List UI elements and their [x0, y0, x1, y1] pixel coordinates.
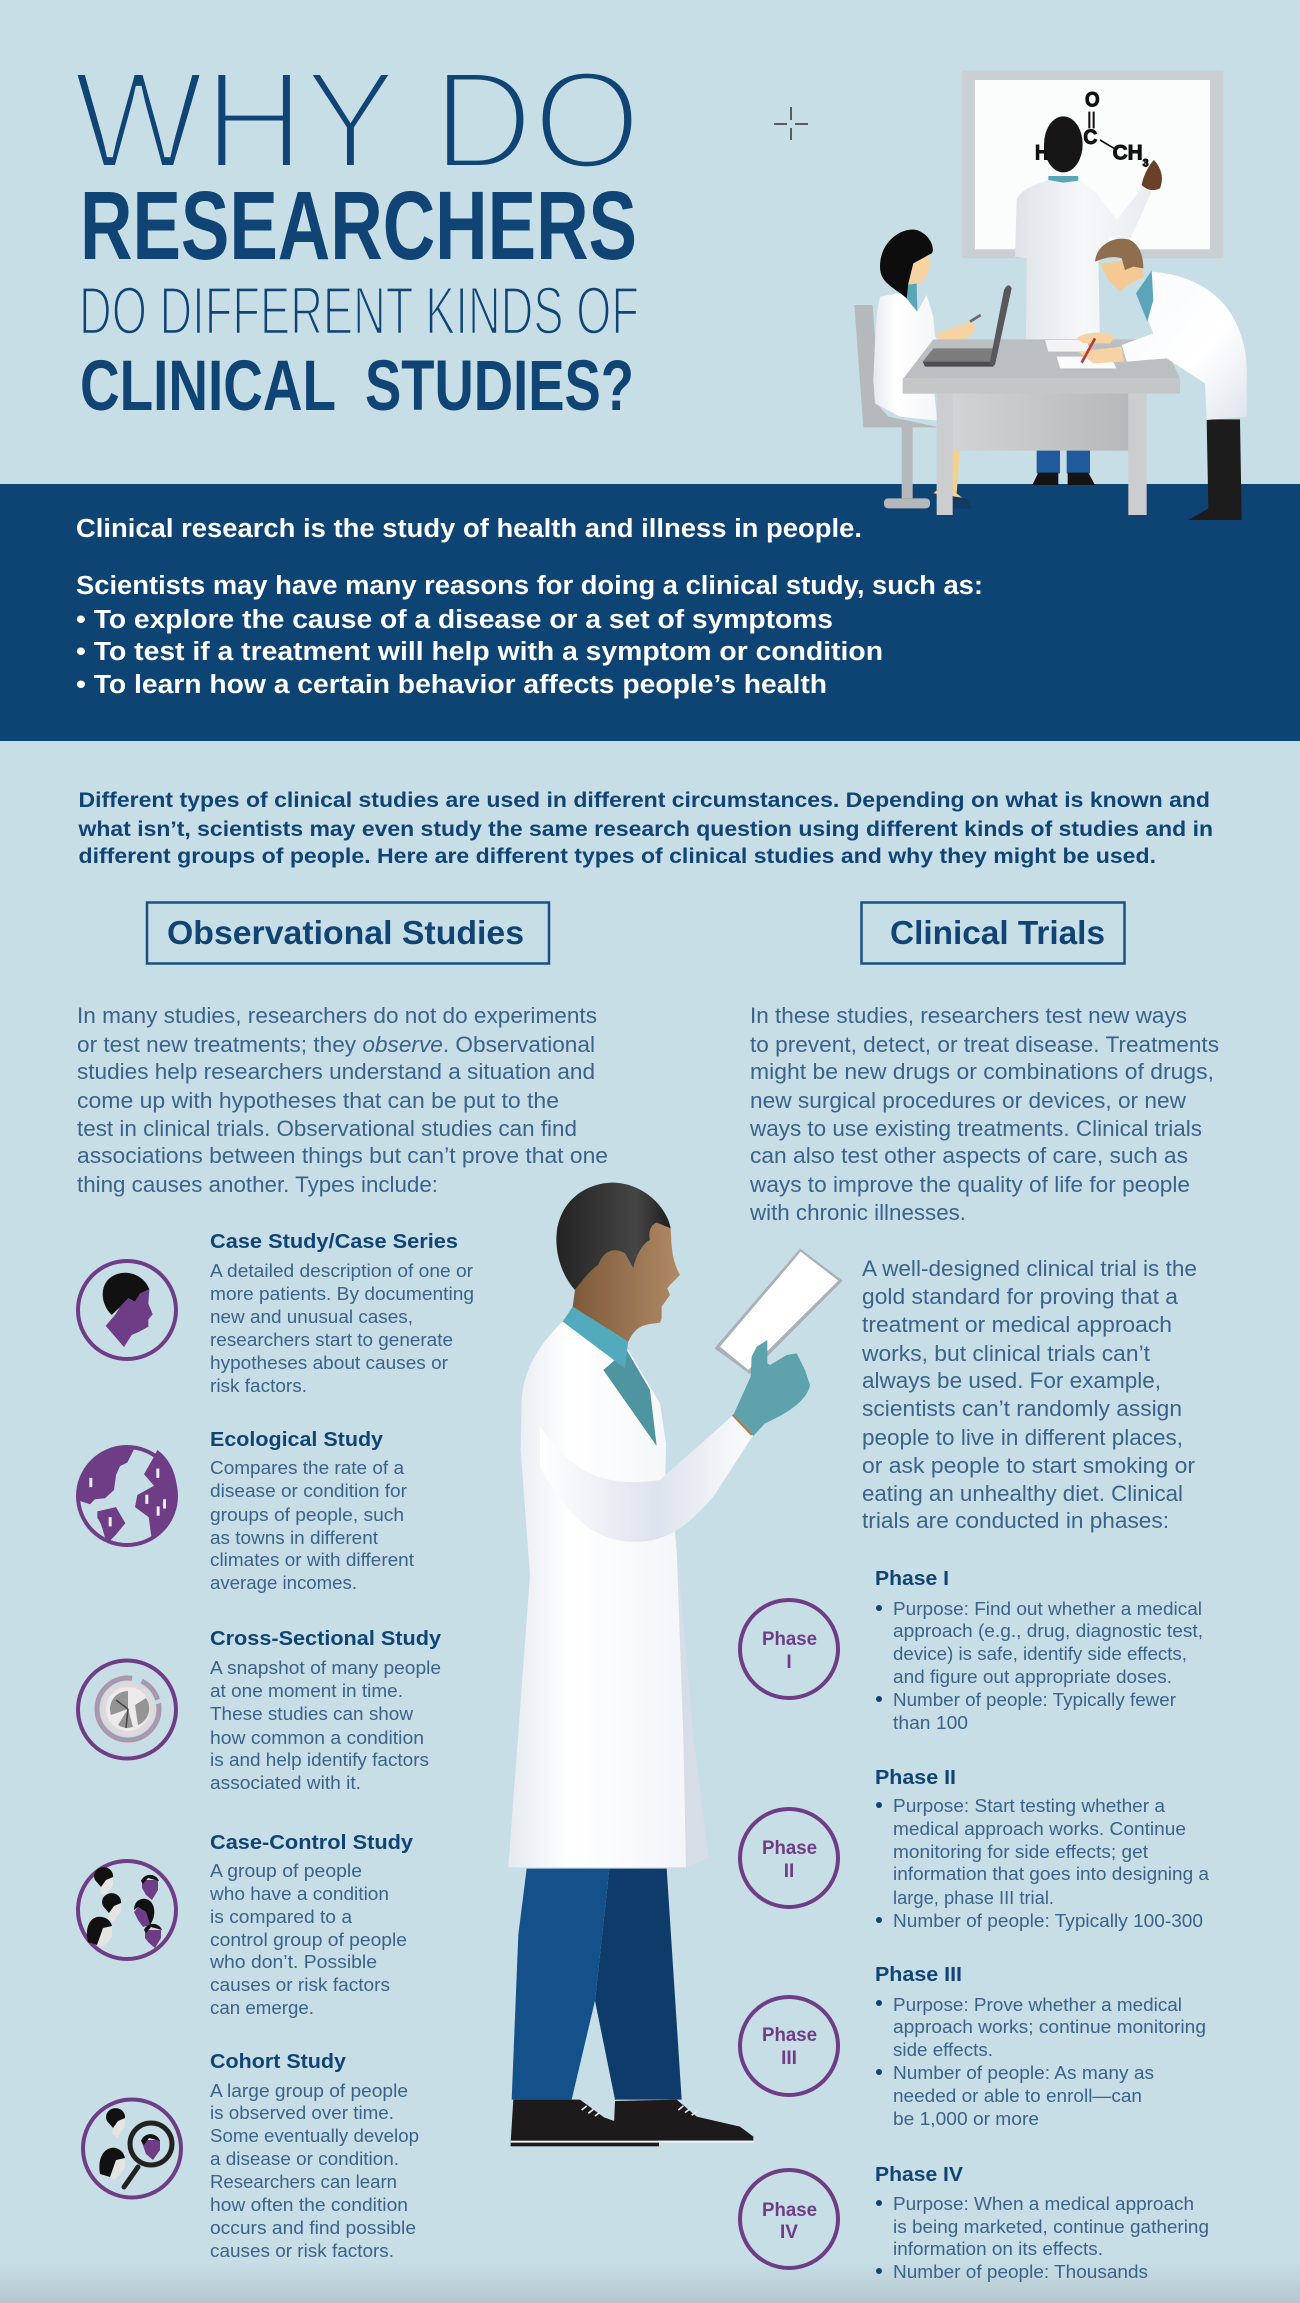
- text block: case study: new and unusual cases,: [210, 1306, 413, 1327]
- text block: cross-sectional study: is and help identify factors: [210, 1749, 429, 1770]
- text block: observational studies description: come up with hypotheses that can be put to the: [77, 1088, 559, 1113]
- panel: navy introduction band: • To explore the cause of a disease or a set of symptoms: [76, 606, 833, 634]
- phase IV badge: IV: [780, 2222, 798, 2243]
- text block: case study: [210, 1230, 474, 1396]
- chemical formula: CH: [1113, 140, 1143, 164]
- illustration: scientist with tablet: [508, 1183, 843, 2146]
- phase III text: side effects.: [893, 2039, 993, 2060]
- text block: cross-sectional study: [210, 1627, 442, 1793]
- phase I text: device) is safe, identify side effects,: [893, 1643, 1187, 1664]
- table: [903, 339, 1180, 515]
- text block: cohort study: A large group of people: [210, 2080, 408, 2101]
- title: RESEARCHERS: [80, 171, 637, 280]
- text block: ecological study: average incomes.: [210, 1572, 357, 1593]
- icon: globe: [77, 1447, 177, 1545]
- text block: case-control study: is compared to a: [210, 1906, 353, 1927]
- phase II text: Phase II: [875, 1766, 956, 1789]
- chemical formula: 3: [1143, 158, 1149, 170]
- text block: observational studies description: In many studies, researchers do not do experiments: [77, 1003, 597, 1028]
- text block: observational studies description: [77, 1003, 608, 1197]
- phase I badge: I: [786, 1652, 792, 1673]
- phase III text: Number of people: As many as: [893, 2062, 1154, 2083]
- text block: clinical trials description: to prevent, detect, or treat disease. Treatments: [750, 1032, 1219, 1057]
- text block: case-control study: can emerge.: [210, 1997, 314, 2018]
- text block: observational studies description: or test new treatments; they observe. Observational: [77, 1032, 595, 1057]
- phase I badge: [740, 1600, 838, 1698]
- gloved hand: [733, 1340, 810, 1436]
- text block: cross-sectional study: at one moment in time.: [210, 1680, 403, 1701]
- text block: clinical trials description: new surgical procedures or devices, or new: [750, 1088, 1186, 1113]
- text block: cohort study: Cohort Study: [210, 2050, 347, 2073]
- shirt and collar: [563, 1307, 657, 1446]
- shoes: [511, 2100, 754, 2146]
- text block: cohort study: is observed over time.: [210, 2102, 394, 2123]
- text block: ecological study: Ecological Study: [210, 1428, 384, 1451]
- icon: clock: [78, 1660, 176, 1758]
- text block: clinical trials description: with chronic illnesses.: [749, 1200, 966, 1225]
- text block: clinical trials description: might be new drugs or combinations of drugs,: [750, 1059, 1214, 1084]
- phase II text: Number of people: Typically 100-300: [893, 1910, 1203, 1931]
- phase IV text: information on its effects.: [893, 2238, 1103, 2259]
- text block: cohort study: Some eventually develop: [210, 2125, 419, 2146]
- seated researcher and chair: [854, 229, 981, 508]
- icon: case study head: [78, 1261, 176, 1359]
- phase III text: approach works; continue monitoring: [893, 2016, 1206, 2037]
- phase III text: Purpose: Prove whether a medical: [893, 1994, 1182, 2015]
- whiteboard: [962, 71, 1223, 258]
- phase I text: Purpose: Find out whether a medical: [893, 1598, 1202, 1619]
- text block: clinical trials description: ways to use existing treatments. Clinical trials: [749, 1116, 1202, 1141]
- text block: case study: Case Study/Case Series: [210, 1230, 458, 1253]
- chemical formula: H: [1035, 140, 1048, 164]
- phase I text: [875, 1567, 1203, 1733]
- phase III text: be 1,000 or more: [893, 2108, 1039, 2129]
- text block: case-control study: [209, 1831, 414, 2018]
- lab coat: [508, 1322, 708, 1867]
- cursor crosshair mark: [774, 107, 808, 140]
- chemical formula: O: [1085, 88, 1100, 112]
- phase IV text: is being marketed, continue gathering: [893, 2216, 1209, 2237]
- text block: gold standard explanation: eating an unhealthy diet. Clinical: [862, 1481, 1183, 1506]
- text block: cross-sectional study: how common a condition: [210, 1727, 424, 1748]
- text block: gold standard explanation: trials are conducted in phases:: [862, 1508, 1169, 1533]
- phase II badge: II: [784, 1861, 794, 1882]
- text block: case-control study: causes or risk factors: [210, 1974, 390, 1995]
- text block: cohort study: causes or risk factors.: [210, 2240, 394, 2261]
- phase I text: Phase I: [875, 1567, 949, 1590]
- trousers: [512, 1869, 682, 2100]
- phase II text: information that goes into designing a: [893, 1863, 1210, 1884]
- heading: Clinical Trials: [862, 902, 1124, 964]
- phase II text: [875, 1766, 1210, 1931]
- phase I text: approach (e.g., drug, diagnostic test,: [893, 1620, 1203, 1641]
- text block: ecological study: disease or condition for: [210, 1480, 407, 1501]
- title: WHY DO: [73, 42, 641, 198]
- panel: navy introduction band: • To test if a treatment will help with a symptom or condition: [76, 638, 883, 666]
- phase I badge: Phase: [762, 1629, 817, 1650]
- phase II text: Purpose: Start testing whether a: [893, 1795, 1166, 1816]
- text block: case study: A detailed description of one or: [210, 1260, 473, 1281]
- text block: cohort study: occurs and find possible: [210, 2217, 416, 2238]
- text block: cross-sectional study: A snapshot of many people: [210, 1657, 441, 1678]
- text block: case-control study: who don’t. Possible: [209, 1951, 377, 1972]
- text block: cohort study: how often the condition: [210, 2194, 408, 2215]
- text block: case-control study: who have a condition: [209, 1883, 389, 1904]
- intro paragraph: Different types of clinical studies are used in different circumstances. Depending on what is known and: [78, 788, 1210, 812]
- panel: navy introduction band: • To learn how a certain behavior affects people’s health: [76, 671, 827, 699]
- papers: [1045, 340, 1117, 368]
- phase IV badge: Phase: [762, 2200, 817, 2221]
- text block: ecological study: [210, 1428, 414, 1593]
- icon: case-control groups of heads: [78, 1861, 176, 1959]
- phase II badge: [740, 1809, 838, 1907]
- text block: gold standard explanation: people to live in different places,: [862, 1425, 1183, 1450]
- phase III badge: Phase: [762, 2025, 817, 2046]
- heading: Observational Studies: [147, 902, 549, 964]
- title: CLINICAL: [80, 347, 336, 426]
- heading: Observational Studies: Observational Studies: [167, 914, 524, 951]
- illustration: three researchers at a table: [854, 71, 1247, 520]
- phase III text: needed or able to enroll—can: [893, 2085, 1142, 2106]
- text block: observational studies description: thing causes another. Types include:: [77, 1172, 438, 1197]
- text block: gold standard explanation: [861, 1256, 1197, 1533]
- text block: clinical trials description: can also test other aspects of care, such as: [750, 1143, 1188, 1168]
- panel: navy introduction band: [0, 484, 1300, 741]
- text block: case study: hypotheses about causes or: [210, 1352, 448, 1373]
- intro paragraph: [77, 788, 1213, 868]
- text block: cohort study: Researchers can learn: [210, 2171, 397, 2192]
- text block: ecological study: as towns in different: [210, 1527, 378, 1548]
- text block: cohort study: [210, 2050, 419, 2261]
- text block: case study: risk factors.: [210, 1375, 307, 1396]
- text block: ecological study: groups of people, such: [210, 1504, 404, 1525]
- text block: case-control study: control group of people: [210, 1929, 407, 1950]
- head: [556, 1183, 680, 1342]
- text block: clinical trials description: In these studies, researchers test new ways: [750, 1003, 1187, 1028]
- text block: case study: researchers start to generate: [210, 1329, 453, 1350]
- title: DO DIFFERENT KINDS OF: [79, 273, 639, 349]
- text block: observational studies description: associations between things but can’t prove that one: [77, 1143, 608, 1168]
- phase I text: and figure out appropriate doses.: [893, 1666, 1172, 1687]
- phase II badge: Phase: [762, 1838, 817, 1859]
- phase I text: Number of people: Typically fewer: [893, 1689, 1176, 1710]
- coat arm: [540, 1415, 753, 1542]
- phase III badge: [740, 1997, 838, 2095]
- intro paragraph: different groups of people. Here are different types of clinical studies and why they might be used.: [78, 844, 1156, 868]
- laptop: [923, 285, 1012, 367]
- title: [73, 42, 641, 426]
- phase IV text: Purpose: When a medical approach: [893, 2193, 1194, 2214]
- icon: cohort magnifier and heads: [83, 2100, 181, 2198]
- text block: case study: more patients. By documenting: [210, 1283, 474, 1304]
- bending researcher: [1077, 239, 1247, 520]
- intro paragraph: what isn’t, scientists may even study the same research question using different kinds of studies and in: [77, 817, 1213, 841]
- standing researcher: [1015, 116, 1162, 485]
- phase IV text: Phase IV: [875, 2163, 963, 2186]
- chemical formula: [1035, 88, 1149, 170]
- phase III badge: III: [781, 2048, 797, 2069]
- tablet: [714, 1249, 843, 1374]
- phase I text: than 100: [893, 1712, 968, 1733]
- text block: case-control study: Case-Control Study: [210, 1831, 414, 1854]
- text block: gold standard explanation: A well-designed clinical trial is the: [862, 1256, 1197, 1281]
- phase IV badge: [740, 2170, 838, 2268]
- heading: Clinical Trials: Clinical Trials: [890, 914, 1105, 951]
- text block: observational studies description: studies help researchers understand a situation and: [77, 1059, 595, 1084]
- text block: gold standard explanation: treatment or medical approach: [862, 1312, 1172, 1337]
- text block: clinical trials description: [749, 1003, 1219, 1225]
- text block: cross-sectional study: associated with it.: [210, 1772, 361, 1793]
- text block: case-control study: A group of people: [210, 1860, 362, 1881]
- text block: gold standard explanation: works, but clinical trials can’t: [861, 1341, 1150, 1366]
- panel: navy introduction band: Clinical research is the study of health and illness in people.: [76, 515, 862, 543]
- text block: cross-sectional study: These studies can show: [210, 1703, 414, 1724]
- text block: ecological study: Compares the rate of a: [210, 1457, 405, 1478]
- panel: navy introduction band: Scientists may have many reasons for doing a clinical study, such as:: [76, 572, 983, 600]
- phase II text: monitoring for side effects; get: [893, 1841, 1148, 1862]
- phase III text: Phase III: [875, 1963, 962, 1986]
- phase II text: large, phase III trial.: [893, 1887, 1054, 1908]
- text block: gold standard explanation: always be used. For example,: [862, 1368, 1161, 1393]
- text block: ecological study: climates or with different: [210, 1549, 414, 1570]
- text block: gold standard explanation: gold standard for proving that a: [862, 1284, 1179, 1309]
- text block: cohort study: a disease or condition.: [210, 2148, 399, 2169]
- phase II text: medical approach works. Continue: [893, 1818, 1186, 1839]
- phase III text: [875, 1963, 1206, 2129]
- title: STUDIES?: [365, 347, 634, 426]
- phase IV text: [875, 2163, 1209, 2282]
- text block: gold standard explanation: or ask people to start smoking or: [862, 1453, 1195, 1478]
- text block: cross-sectional study: Cross-Sectional Study: [210, 1627, 442, 1650]
- text block: clinical trials description: ways to improve the quality of life for people: [749, 1172, 1190, 1197]
- phase IV text: Number of people: Thousands: [893, 2261, 1148, 2282]
- text block: observational studies description: test in clinical trials. Observational studies can find: [77, 1116, 577, 1141]
- chemical formula: C: [1083, 125, 1097, 149]
- text block: gold standard explanation: scientists can’t randomly assign: [862, 1396, 1182, 1421]
